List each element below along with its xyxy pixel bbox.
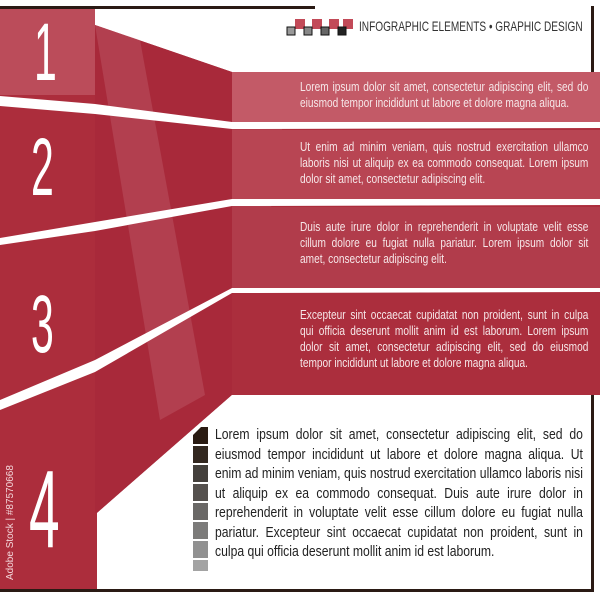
text 2: Ut enim ad minim veniam, quis nostrud exercitation ullamco laboris nisi ut aliquip ex ea commodo consequat. Lorem ipsum dolor sit amet, consectetur adipiscing elit.	[300, 140, 588, 186]
watermark id: Adobe Stock | #87570668	[5, 465, 16, 580]
bottom text block: Lorem ipsum dolor sit amet, consectetur adipiscing elit, sed do eiusmod tempor incididunt ut labore et dolore magna aliqua. Ut enim ad minim veniam, quis nostrud exercitation ullamco laboris nisi ut aliquip ex ea commodo consequat. Duis aute irure dolor in reprehenderit in voluptate velit esse cillum dolore eu fugiat nulla pariatur. Excepteur sint occaecat cupidatat non proident, sunt in culpa qui officia deserunt mollit anim id est laborum.	[215, 427, 583, 560]
number 3: 3	[31, 279, 54, 370]
header title: INFOGRAPHIC ELEMENTS • GRAPHIC DESIGN	[359, 18, 583, 34]
header	[286, 18, 583, 36]
number 4: 4	[29, 448, 60, 571]
number 1: 1	[34, 7, 57, 98]
white divider stripes	[0, 96, 600, 410]
text 3: Duis aute irure dolor in reprehenderit in voluptate velit esse cillum dolore eu fugiat nulla pariatur. Lorem ipsum dolor sit amet, consectetur adipiscing elit.	[300, 220, 588, 266]
white bottom area	[97, 395, 591, 589]
icon: squares	[286, 19, 353, 36]
number 2: 2	[31, 122, 54, 213]
text 1: Lorem ipsum dolor sit amet, consectetur adipiscing elit, sed do eiusmod tempor incididunt ut labore et dolore magna aliqua.	[300, 80, 588, 110]
icon: gradient square stack	[193, 427, 208, 571]
text 4: Excepteur sint occaecat cupidatat non proident, sunt in culpa qui officia deserunt mollit anim id est laborum. Lorem ipsum dolor sit amet, consectetur adipiscing elit, sed do eiusmod tempor incididunt ut labore et dolore magna aliqua.	[300, 308, 588, 370]
